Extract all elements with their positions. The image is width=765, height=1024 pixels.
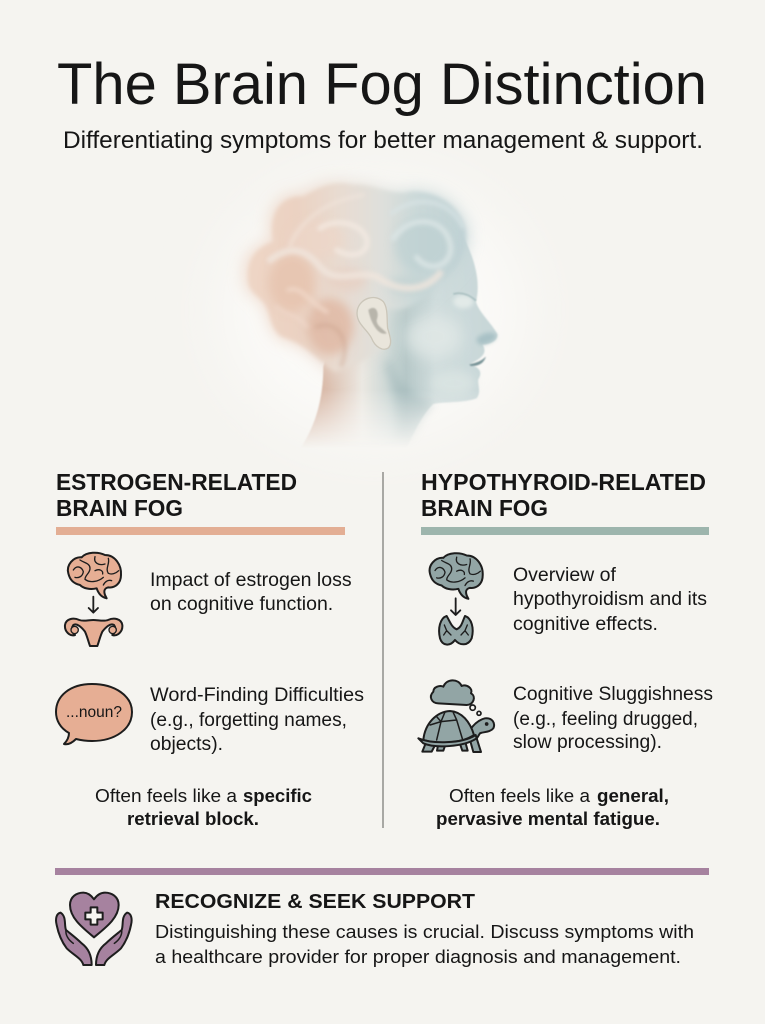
text: sluggishness: Cognitive Sluggishness bbox=[513, 683, 713, 705]
footer rule bbox=[55, 868, 709, 875]
text: estrogen loss: on cognitive function. bbox=[150, 593, 333, 615]
text: hypothyroidism: Overview of bbox=[513, 564, 617, 586]
text: sluggishness bbox=[513, 683, 713, 753]
text: hypothyroidism bbox=[513, 564, 707, 635]
footer text: Distinguishing these causes is crucial. Discuss symptoms with bbox=[155, 921, 694, 942]
icon: brain to thyroid bbox=[430, 553, 483, 645]
summary: estrogen: retrieval block. bbox=[127, 808, 259, 829]
icon: brain to uterus bbox=[65, 553, 122, 646]
heading: estrogen: ESTROGEN-RELATED bbox=[56, 469, 297, 495]
divider bbox=[382, 472, 384, 828]
footer text: a healthcare provider for proper diagnosis and management. bbox=[155, 946, 681, 967]
text: estrogen loss: Impact of estrogen loss bbox=[150, 569, 352, 591]
summary: estrogen: Often feels like a bbox=[95, 785, 238, 806]
text: word-finding: Word-Finding Difficulties bbox=[150, 684, 364, 706]
summary: hypothyroid: general, bbox=[597, 785, 669, 806]
heading: estrogen: BRAIN FOG bbox=[56, 495, 183, 521]
text: word-finding: objects). bbox=[150, 733, 223, 755]
text: word-finding: (e.g., forgetting names, bbox=[150, 709, 347, 731]
summary: hypothyroid: Often feels like a bbox=[449, 785, 591, 806]
text: hypothyroidism: cognitive effects. bbox=[513, 613, 658, 635]
icon: thought cloud and turtle bbox=[418, 680, 494, 752]
face shading bbox=[405, 293, 496, 397]
summary: hypothyroid: pervasive mental fatigue. bbox=[436, 808, 660, 829]
heading: hypothyroid: HYPOTHYROID-RELATED bbox=[421, 469, 706, 495]
heading rule: estrogen bbox=[56, 527, 345, 535]
icon: speech bubble bbox=[56, 684, 132, 744]
text: estrogen loss bbox=[150, 569, 352, 615]
text: sluggishness: (e.g., feeling drugged, bbox=[513, 708, 698, 730]
heading: recognize: RECOGNIZE & SEEK SUPPORT bbox=[155, 890, 475, 913]
panel: estrogen-related brain fog bbox=[56, 469, 364, 829]
ear bbox=[357, 298, 391, 349]
footer text bbox=[155, 921, 694, 967]
text: sluggishness: slow processing). bbox=[513, 731, 662, 753]
text: hypothyroidism: hypothyroidism and its bbox=[513, 588, 707, 610]
heading: estrogen bbox=[56, 469, 297, 521]
illustration: head profile with fog hair bbox=[243, 180, 497, 452]
heading: hypothyroid bbox=[421, 469, 706, 521]
panel: hypothyroid-related brain fog bbox=[418, 469, 713, 829]
hair fog bbox=[243, 180, 469, 375]
summary: estrogen bbox=[95, 785, 312, 829]
heading rule: hypothyroid bbox=[421, 527, 709, 535]
title: The Brain Fog Distinction bbox=[57, 52, 707, 117]
subtitle: Differentiating symptoms for better management & support. bbox=[63, 127, 703, 154]
icon: speech bubble: ...noun? bbox=[66, 704, 122, 721]
text: word-finding bbox=[150, 684, 364, 755]
panel: recognize and seek support bbox=[55, 868, 709, 967]
summary: hypothyroid bbox=[436, 785, 669, 829]
heading: hypothyroid: BRAIN FOG bbox=[421, 495, 548, 521]
neck and face bbox=[305, 242, 498, 443]
icon: hands holding heart bbox=[56, 893, 132, 965]
summary: estrogen: specific bbox=[243, 785, 312, 806]
